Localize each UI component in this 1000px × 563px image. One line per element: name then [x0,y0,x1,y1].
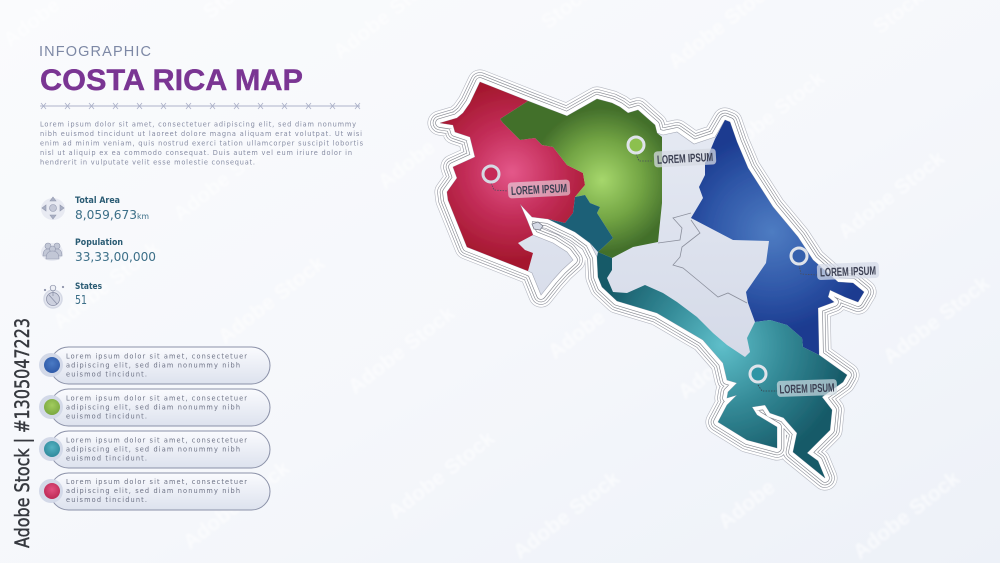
intro paragraph: enim ad minim veniam, quis nostrud exerci tation ullamcorper suscipit lobortis [40,140,364,148]
legend item: red: Lorem ipsum dolor sit amet, consectetuer [66,478,247,486]
legend item: green: euismod tincidunt. [66,412,147,420]
stat: total area: km [137,212,149,221]
marker: red region [483,166,508,191]
legend item: blue [39,347,270,384]
intro paragraph: nisl ut aliquip ex ea commodo consequat. Duis autem vel eum iriure dolor in [40,149,352,157]
label: teal region [777,379,837,397]
marker: green region [628,137,653,161]
unshaded land [440,82,864,478]
watermark pattern: Adobe Stock [49,237,164,334]
stat: total area: Total Area [75,196,120,206]
watermark pattern: Adobe Stock [879,272,994,369]
icon: population [41,243,63,261]
legend item: green: Lorem ipsum dolor sit amet, consectetuer [66,394,247,402]
region: dark teal strait [548,195,613,252]
title eyebrow: INFOGRAPHIC: INFOGRAPHIC [39,44,151,60]
watermark pattern: Adobe Stock [834,147,949,244]
title: COSTA RICA MAP: COSTA RICA MAP [40,64,303,97]
legend item: red: adipiscing elit, sed diam nonummy nibh [66,487,240,495]
intro paragraph: hendrerit in vulputate velit esse molestie consequat. [40,158,255,166]
stat: states [75,282,102,307]
watermark pattern: Adobe [544,306,610,364]
legend item: red [39,473,270,510]
legend item: green [39,389,270,426]
map contour rings [440,82,864,478]
legend item: teal [39,431,270,468]
stat: total area: 8,059,673 [75,207,137,222]
watermark pattern: Adobe [714,476,780,534]
stat: states: 51 [75,292,87,307]
region: blue [691,120,864,355]
icon: states [44,285,64,308]
watermark pattern: Adobe Stock [179,457,294,554]
watermark pattern: Adobe Stock [214,252,329,349]
stat: population: 33,33,00,000 [75,249,156,264]
marker: blue region [791,248,817,275]
watermark pattern: Adobe Stock [509,467,624,563]
watermark pattern: Adobe Stock [344,302,459,399]
watermark pattern: Adobe Stock [714,67,829,164]
stat: population [75,238,156,264]
stock credit: Adobe Stock | #1305047223 [11,318,34,548]
legend item: red: euismod tincidunt. [66,496,147,504]
stat: population: Population [75,238,123,248]
stat: total area [75,196,149,222]
legend item: blue: adipiscing elit, sed diam nonummy nibh [66,362,240,370]
legend item: teal: euismod tincidunt. [66,454,147,462]
watermark pattern: Adobe [674,346,740,404]
label: blue region: LOREM IPSUM [820,264,876,279]
legend item: blue: Lorem ipsum dolor sit amet, consectetuer [66,352,247,360]
map of Costa Rica [440,82,864,478]
stat: states: States [75,282,102,292]
intro paragraph: nibh euismod tincidunt ut laoreet dolore magna aliquam erat volutpat. Ut wisi [40,130,362,138]
label: green region: LOREM IPSUM [657,150,713,167]
region: red [440,82,585,271]
legend item: teal: adipiscing elit, sed diam nonummy nibh [66,446,240,454]
legend item: blue: euismod tincidunt. [66,370,147,378]
internal district borders [658,213,747,303]
legend item: green: adipiscing elit, sed diam nonummy nibh [66,404,240,412]
gulf island [532,222,543,230]
divider with crosses [40,103,360,109]
watermark pattern: Adobe [374,136,440,194]
intro paragraph [40,120,364,166]
region: teal [597,252,847,478]
label: teal region: LOREM IPSUM [779,381,835,396]
region: green [500,99,662,258]
label: blue region [817,262,879,280]
marker: teal region [750,366,777,391]
legend item: teal: Lorem ipsum dolor sit amet, consectetuer [66,436,247,444]
intro paragraph: Lorem ipsum dolor sit amet, consectetuer adipiscing elit, sed diam nonummy [40,120,356,128]
label: green region [654,148,716,168]
label: red region: LOREM IPSUM [511,181,567,198]
watermark pattern: Adobe Stock [169,129,284,226]
label: red region [508,179,570,199]
watermark pattern: Adobe Stock [384,427,499,524]
watermark pattern: Adobe Stock [849,467,964,563]
icon: total area [41,197,65,220]
